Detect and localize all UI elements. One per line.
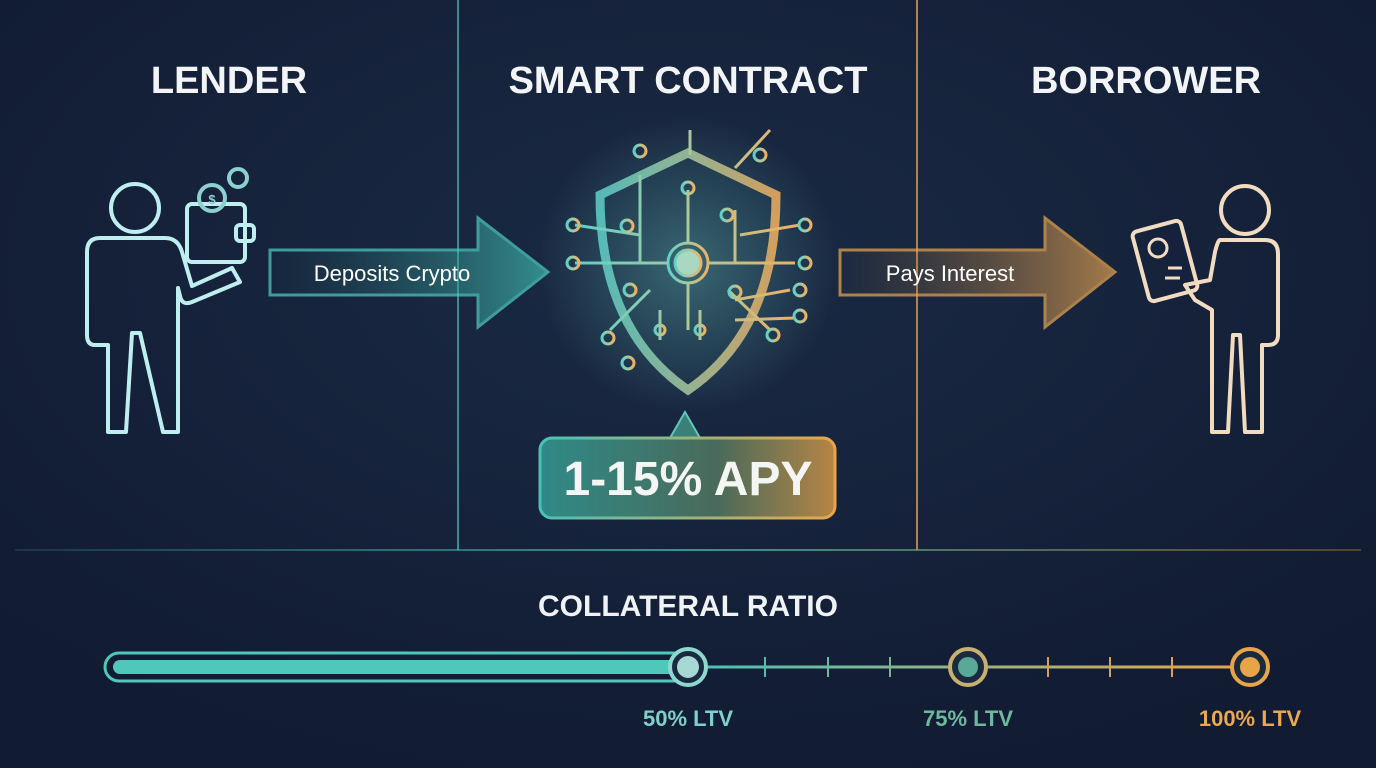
chart: collateral ratio bar [105, 649, 1301, 731]
title: lender: LENDER [151, 60, 307, 102]
callout: APY: 1-15% APY [564, 453, 812, 506]
callout: APY [540, 412, 835, 518]
arrow: deposits crypto: Deposits Crypto [314, 261, 470, 286]
arrow: pays interest [840, 218, 1115, 327]
icon: lender with wallet [87, 169, 254, 432]
icon: borrower with tablet [1132, 186, 1278, 432]
title: smart contract: SMART CONTRACT [509, 60, 867, 102]
chart: collateral ratio bar: 50% LTV [643, 706, 733, 731]
arrow: pays interest: Pays Interest [886, 261, 1014, 286]
chart: collateral ratio bar: 75% LTV [923, 706, 1013, 731]
text: $ [208, 192, 216, 207]
title: borrower: BORROWER [1031, 60, 1261, 102]
heading: collateral ratio: COLLATERAL RATIO [538, 590, 838, 623]
arrow: deposits crypto [270, 218, 548, 327]
chart: collateral ratio bar: 100% LTV [1199, 706, 1301, 731]
icon: shield circuit [538, 115, 838, 415]
